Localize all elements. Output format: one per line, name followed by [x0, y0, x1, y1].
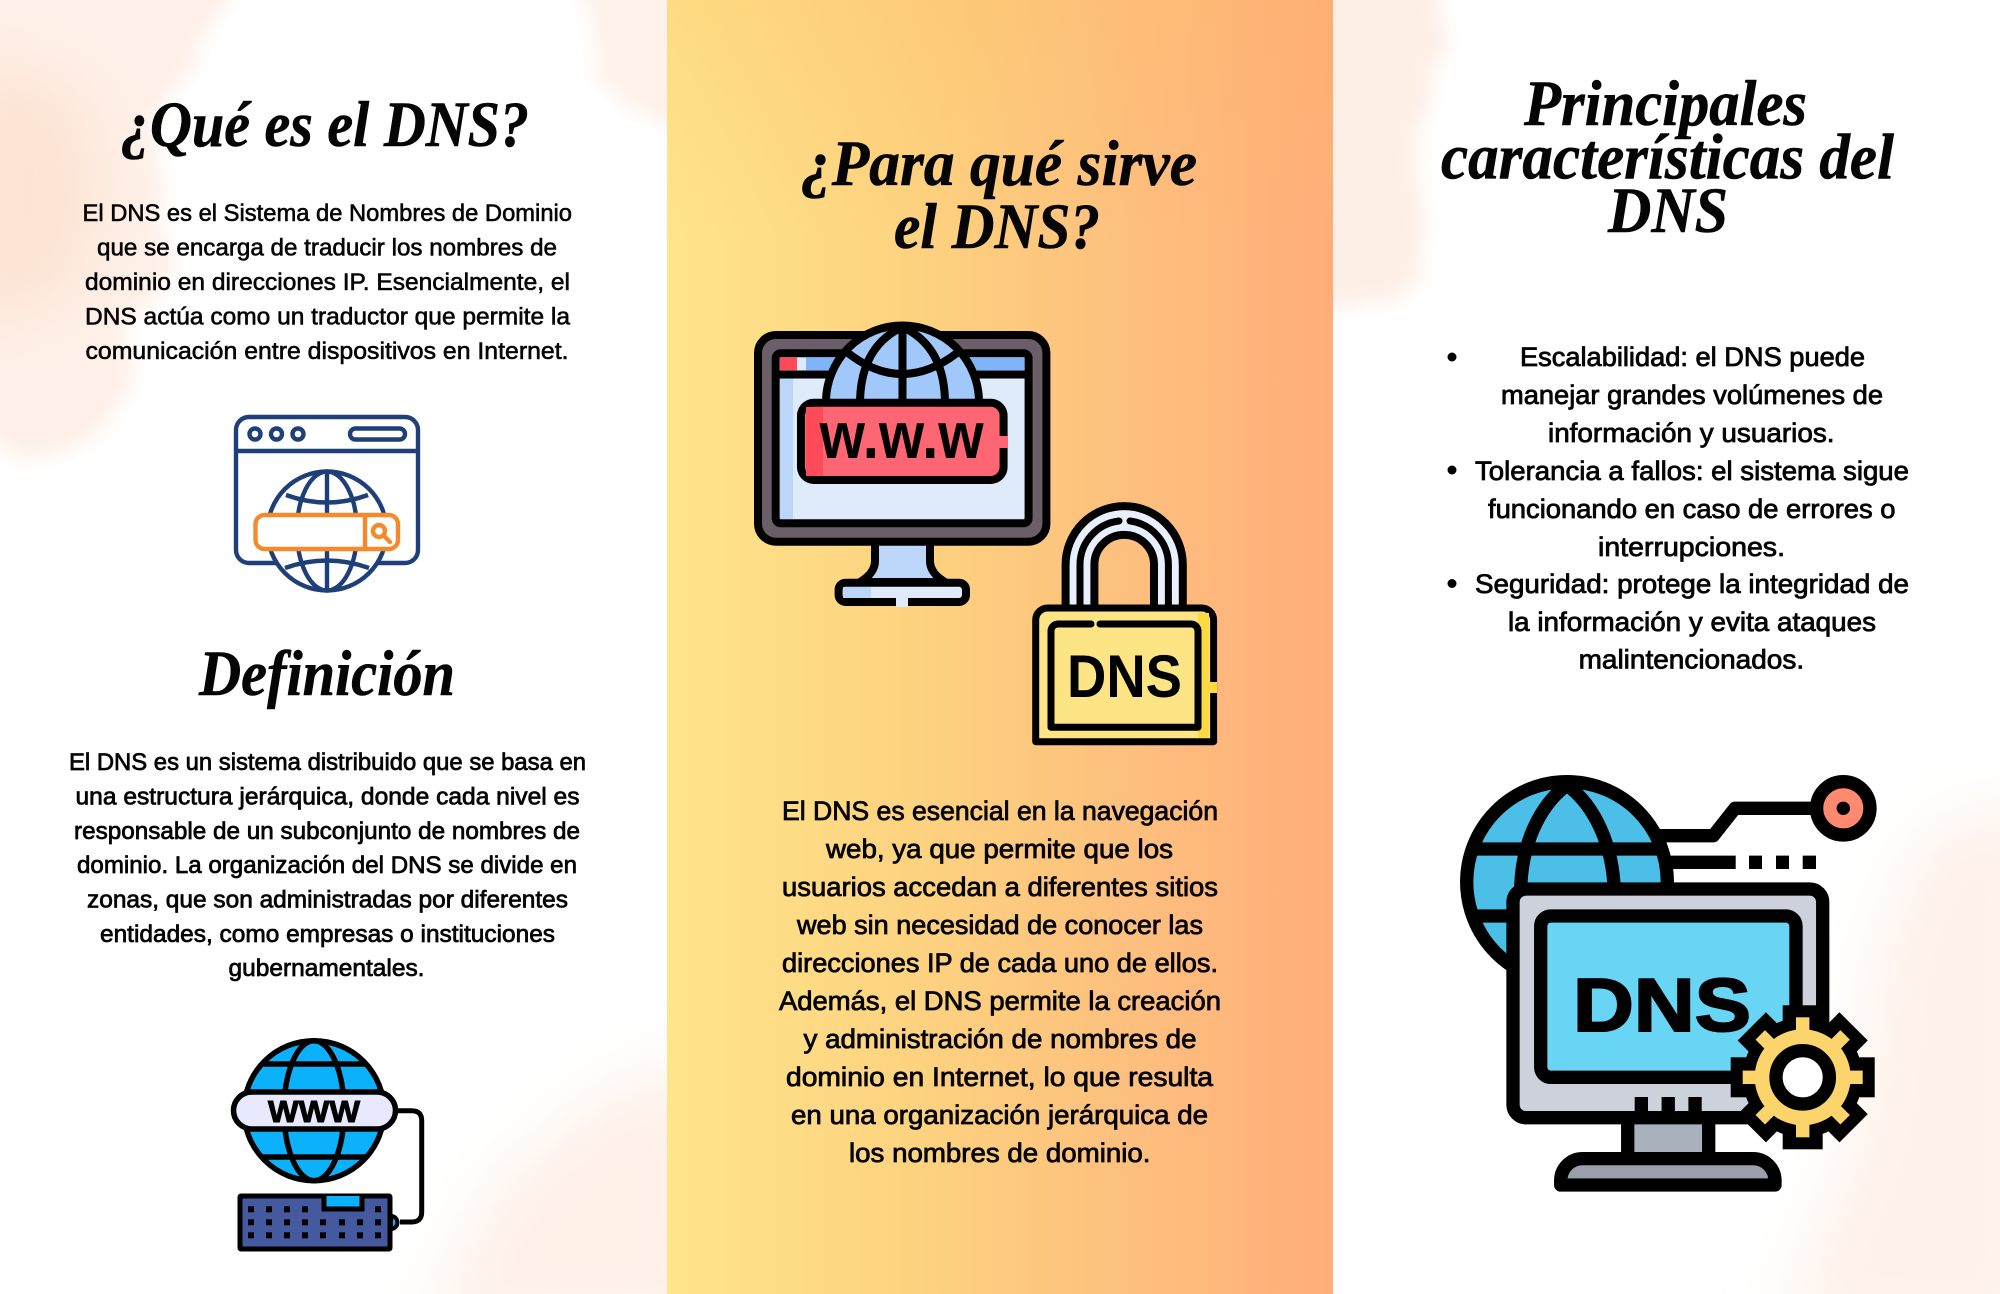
heading: Principales características del DNS: Principales: [1523, 68, 1807, 140]
text block: qué es el DNS: [82, 200, 572, 365]
heading: Principales características del DNS: [1441, 68, 1894, 247]
heading: Para qué sirve el DNS: el DNS?: [894, 191, 1100, 263]
text block: para qué sirve: Además, el DNS permite la creación: [779, 986, 1221, 1016]
www banner: [801, 403, 1004, 480]
icon: WWW globe with keyboard: [234, 1041, 422, 1249]
list: características: [1448, 342, 1909, 674]
text block: definición: entidades, como empresas o instituciones: [100, 921, 555, 948]
icon: browser window with globe and search bar: [236, 417, 418, 590]
heading: Qué es el DNS: ¿Qué es el DNS?: [121, 89, 529, 161]
text block: para qué sirve: dominio en Internet, lo que resulta: [786, 1062, 1213, 1092]
list: características: Tolerancia a fallos: el sistema sigue: [1475, 456, 1909, 486]
text block: para qué sirve: [779, 796, 1221, 1168]
text block: para qué sirve: usuarios accedan a diferentes sitios: [782, 872, 1218, 902]
text block: qué es el DNS: comunicación entre dispositivos en Internet.: [86, 338, 568, 365]
text block: definición: zonas, que son administradas por diferentes: [87, 886, 568, 914]
list: características: interrupciones.: [1598, 532, 1785, 562]
heading: Para qué sirve el DNS: ¿Para qué sirve: [801, 128, 1197, 200]
icon: monitor with www and globe: [758, 326, 1046, 607]
text block: para qué sirve: y administración de nombres de: [804, 1024, 1196, 1054]
text block: qué es el DNS: que se encarga de traducir los nombres de: [97, 234, 557, 262]
text block: definición: dominio. La organización del DNS se divide en: [77, 852, 577, 879]
stand: [1628, 1117, 1709, 1159]
text block: definición: [69, 749, 586, 982]
icon: monitor with www and globe: w.w.w: [819, 398, 984, 472]
globe: [1467, 782, 1667, 982]
heading: Principales características del DNS: características del: [1441, 122, 1894, 194]
icon: DNS monitor with globe and gear: [1467, 782, 1875, 1185]
icon: WWW globe with keyboard: WWW: [268, 1094, 361, 1129]
text block: para qué sirve: El DNS es esencial en la navegación: [782, 796, 1218, 826]
panel: middle gradient column: [667, 0, 1333, 1294]
monitor stand: [860, 541, 945, 582]
list: características: funcionando en caso de errores o: [1488, 494, 1896, 524]
text block: qué es el DNS: DNS actúa como un traductor que permite la: [85, 304, 571, 330]
watercolor stains: right panel: [1300, 0, 2000, 1294]
list: características: malintencionados.: [1579, 644, 1804, 674]
gear: [1731, 1005, 1875, 1149]
text block: definición: una estructura jerárquica, donde cada nivel es: [76, 784, 580, 810]
text block: qué es el DNS: dominio en direcciones IP. Esencialmente, el: [85, 269, 570, 296]
circuit lines: [1655, 808, 1817, 836]
heading: Principales características del DNS: DNS: [1607, 175, 1728, 247]
text block: definición: El DNS es un sistema distribuido que se basa en: [69, 749, 586, 776]
text block: para qué sirve: en una organización jerárquica de: [791, 1100, 1208, 1130]
list: características: Escalabilidad: el DNS puede: [1520, 342, 1865, 372]
text block: definición: gubernamentales.: [228, 955, 424, 982]
list: características: Seguridad: protege la integridad de: [1475, 569, 1909, 599]
list: características: manejar grandes volúmenes de: [1501, 380, 1883, 410]
list: características: la información y evita ataques: [1508, 607, 1876, 637]
text block: para qué sirve: web sin necesidad de conocer las: [796, 910, 1203, 940]
icon: DNS monitor with globe and gear: DNS: [1573, 963, 1751, 1047]
globe: [826, 326, 979, 405]
list: características: información y usuarios.: [1548, 418, 1834, 448]
heading: Definición: Definición: [198, 638, 455, 710]
text block: para qué sirve: direcciones IP de cada uno de ellos.: [782, 948, 1218, 978]
heading: Para qué sirve el DNS: [801, 128, 1197, 263]
text block: definición: responsable de un subconjunto de nombres de: [74, 818, 580, 845]
icon: DNS padlock: [1036, 520, 1217, 742]
watercolor stains: left panel: [0, 0, 720, 1294]
monitor: [1513, 889, 1823, 1118]
text block: qué es el DNS: El DNS es el Sistema de Nombres de Dominio: [82, 200, 572, 227]
icon: DNS padlock: DNS: [1067, 643, 1182, 710]
monitor frame: [758, 335, 1046, 542]
text block: para qué sirve: web, ya que permite que los: [825, 834, 1173, 864]
text block: para qué sirve: los nombres de dominio.: [849, 1138, 1150, 1168]
